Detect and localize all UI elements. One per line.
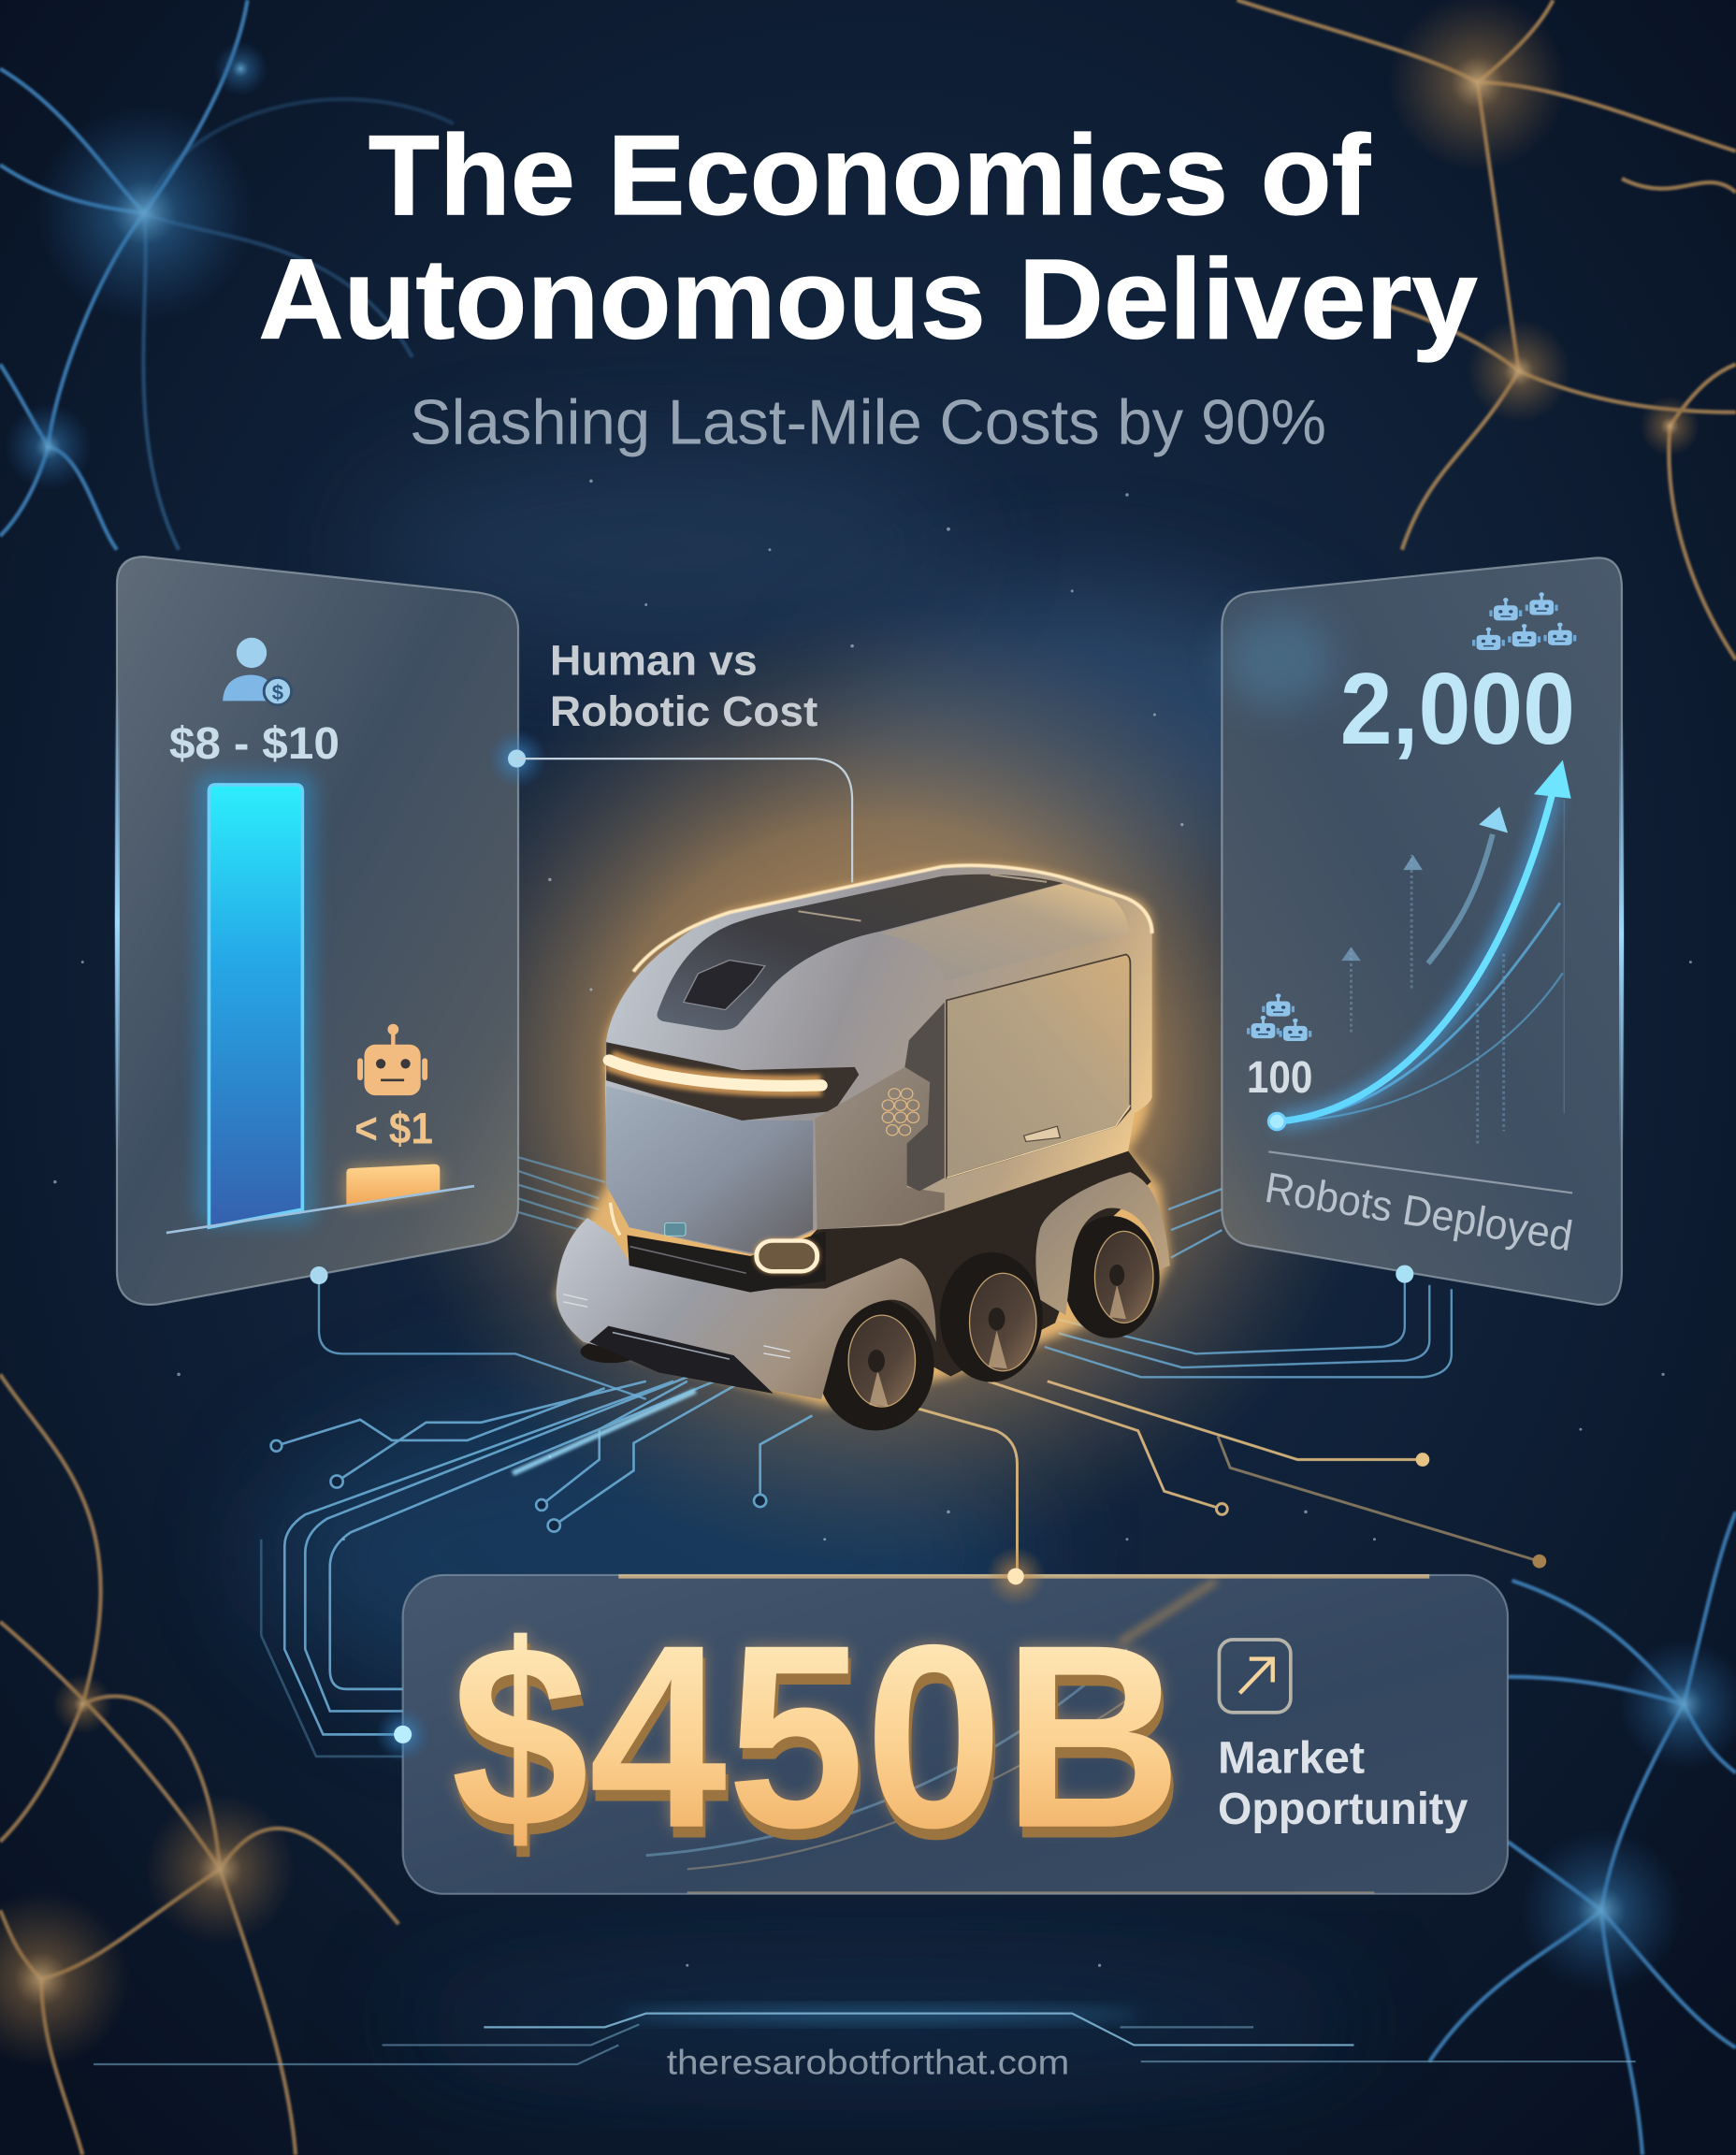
value: $8 - $10: $8 - $10 (169, 718, 340, 769)
honeycomb badge (882, 1089, 919, 1135)
label: market opportunity: Market (1218, 1733, 1365, 1784)
dark pillar (904, 1002, 945, 1191)
value: under $1: < $1 (354, 1104, 433, 1153)
roof panel (880, 884, 1130, 981)
value: $450B: $450B (451, 1591, 1182, 1883)
chassis (759, 1151, 1151, 1376)
left marker light (611, 1203, 620, 1235)
side lower panel (815, 1067, 945, 1229)
website: theresarobotforthat.com (667, 2043, 1069, 2081)
light strip (609, 1060, 821, 1086)
value: $450B: $450B (454, 1602, 1185, 1894)
value: $450B: $450B (451, 1591, 1182, 1883)
dark light band (606, 1042, 859, 1121)
chart baseline (166, 1186, 474, 1233)
circuit lines: left sweep to the market panel (261, 1374, 812, 1757)
title: Autonomous Delivery (258, 235, 1478, 362)
icon: person with dollar coin: $ (272, 681, 283, 704)
top gold edge (618, 1575, 1429, 1578)
callout: human vs robotic cost (486, 636, 852, 882)
connector dots (310, 1266, 1413, 1284)
panel streaks (646, 1581, 1216, 1869)
base bumper (557, 1218, 936, 1399)
callout: human vs robotic cost: Robotic Cost (550, 687, 817, 735)
delivery robot illustration (557, 865, 1170, 1430)
label: market opportunity: Opportunity (1218, 1784, 1468, 1834)
lower intake (589, 1326, 774, 1394)
icons: robot group top (1472, 592, 1576, 650)
neural network web: gold bottom left (0, 1374, 398, 2155)
label: robots deployed: Robots Deployed (1262, 1164, 1576, 1260)
value: 2,000: 2,000 (1340, 653, 1575, 766)
growth chart (1268, 760, 1571, 1144)
neural network web: blue bottom right (1429, 1511, 1736, 2155)
panel connector: blue node (375, 1707, 430, 1762)
robot glow outline (557, 865, 1170, 1407)
rear fender (1035, 1172, 1170, 1315)
blue bar: human cost (195, 773, 316, 1227)
icon: growth arrow (1219, 1640, 1291, 1713)
middle wheel (940, 1252, 1043, 1382)
sensor module (684, 961, 765, 1010)
title (258, 111, 1478, 362)
callout: human vs robotic cost: Human vs (550, 636, 758, 684)
title: The Economics of (369, 111, 1370, 239)
bumper vents (563, 1294, 790, 1358)
neural network web: gold top right (1237, 0, 1736, 659)
neural network web: blue top left (0, 0, 454, 550)
panel edge glow (115, 687, 120, 1154)
value: 100: 100 (1247, 1052, 1312, 1103)
icon: person with dollar coin (223, 638, 292, 705)
door handle (1024, 1126, 1060, 1141)
subtitle: Slashing Last-Mile Costs by 90% (410, 388, 1326, 458)
icon: robot head (357, 1024, 427, 1095)
front badge (665, 1222, 686, 1236)
label: market opportunity (1218, 1733, 1468, 1834)
stars (53, 480, 1692, 1967)
panel edge glow (1619, 715, 1624, 1154)
bright roof edge (633, 865, 1152, 972)
panel: market opportunity (403, 1575, 1508, 1894)
panel: human vs robotic cost (115, 557, 518, 1305)
panel connector: gold node (986, 1546, 1046, 1607)
roof vents (799, 875, 1047, 920)
front panel (606, 1086, 813, 1254)
front grille (627, 1231, 826, 1293)
icons: robot group bottom (1247, 993, 1311, 1041)
rear wheel (1063, 1216, 1160, 1338)
circuit lines: gold traces (908, 1381, 1546, 1575)
headlight (755, 1239, 819, 1273)
footer circuit line (94, 2008, 1636, 2064)
panel: robots deployed (1222, 557, 1624, 1305)
cargo door (947, 954, 1130, 1178)
gold bar: robot cost (346, 1164, 440, 1206)
circuit lines: panel connectors (319, 1157, 1452, 1399)
rear left tyre (581, 1340, 641, 1363)
main body (605, 865, 1152, 1256)
dark canopy (657, 875, 1063, 1030)
front wheel (817, 1299, 934, 1430)
